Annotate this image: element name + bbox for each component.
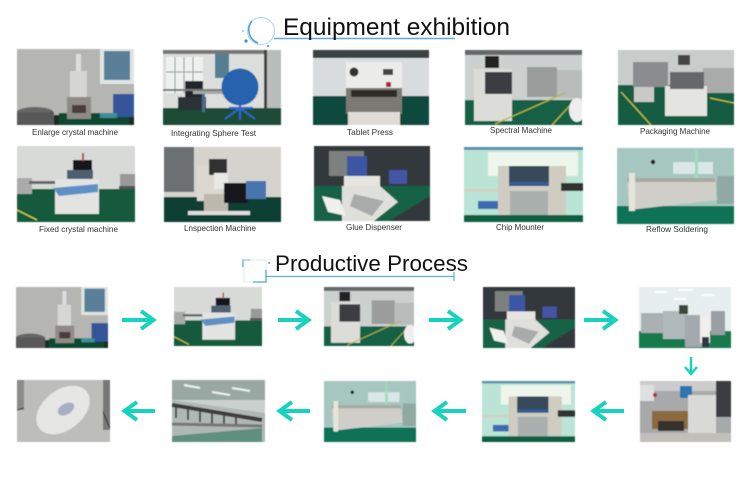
icon: title square	[243, 260, 270, 282]
caption: tablet press: Tablet Press	[347, 127, 393, 137]
title: Equipment exhibition	[242, 14, 510, 47]
caption: chip mounter: Chip Mounter	[496, 222, 544, 232]
arrow 6	[594, 402, 624, 420]
caption: enlarge crystal machine: Enlarge crystal machine	[32, 127, 118, 137]
arrow 5: down	[685, 357, 697, 374]
title text: Productive Process	[275, 251, 468, 276]
step 2 photo	[174, 287, 262, 346]
step 5 photo	[639, 287, 731, 348]
photo: packaging machine	[618, 50, 734, 125]
photo: glue dispenser	[314, 146, 430, 221]
photo: reflow soldering	[617, 148, 734, 224]
panel: equipment gallery	[16, 49, 734, 234]
step 8 photo	[324, 381, 416, 442]
arrow 2	[278, 311, 308, 329]
arrow 9	[124, 402, 155, 420]
panel: productive process flow	[15, 287, 731, 444]
caption: integrating sphere: Integrating Sphere Test	[171, 128, 257, 138]
photo: inspection machine	[164, 147, 281, 222]
step 4 photo	[483, 287, 575, 348]
step 1 photo	[15, 287, 108, 348]
caption: spectral machine: Spectral Machine	[490, 125, 552, 135]
caption: reflow soldering: Reflow Soldering	[646, 224, 708, 234]
step 7 photo	[482, 381, 575, 442]
step 9 photo	[172, 380, 265, 442]
arrow 3	[429, 311, 460, 329]
step 10 photo: finished lamp	[17, 376, 110, 444]
step 6 photo	[640, 381, 731, 442]
arrow 7	[434, 402, 466, 420]
arrow 1	[122, 311, 154, 329]
step 3 photo	[324, 287, 416, 346]
photo: tablet press	[313, 50, 429, 125]
title: Productive Process	[243, 251, 468, 282]
arrow 4	[584, 311, 616, 329]
photo: spectral machine	[465, 50, 585, 125]
caption: inspection machine: Lnspection Machine	[184, 223, 256, 233]
caption: packaging machine: Packaging Machine	[640, 126, 710, 136]
photo: integrating sphere	[163, 50, 281, 125]
photo: chip mounter	[464, 147, 583, 222]
title text: Equipment exhibition	[283, 14, 510, 41]
photo: fixed crystal machine	[17, 146, 135, 222]
icon: title ring	[242, 18, 274, 47]
photo: enlarge crystal machine	[16, 49, 134, 125]
caption: fixed crystal machine: Fixed crystal machine	[39, 224, 118, 234]
title underline	[266, 272, 454, 281]
title underline	[274, 38, 455, 40]
arrow 8	[280, 402, 310, 420]
caption: glue dispenser: Glue Dispenser	[346, 222, 402, 232]
